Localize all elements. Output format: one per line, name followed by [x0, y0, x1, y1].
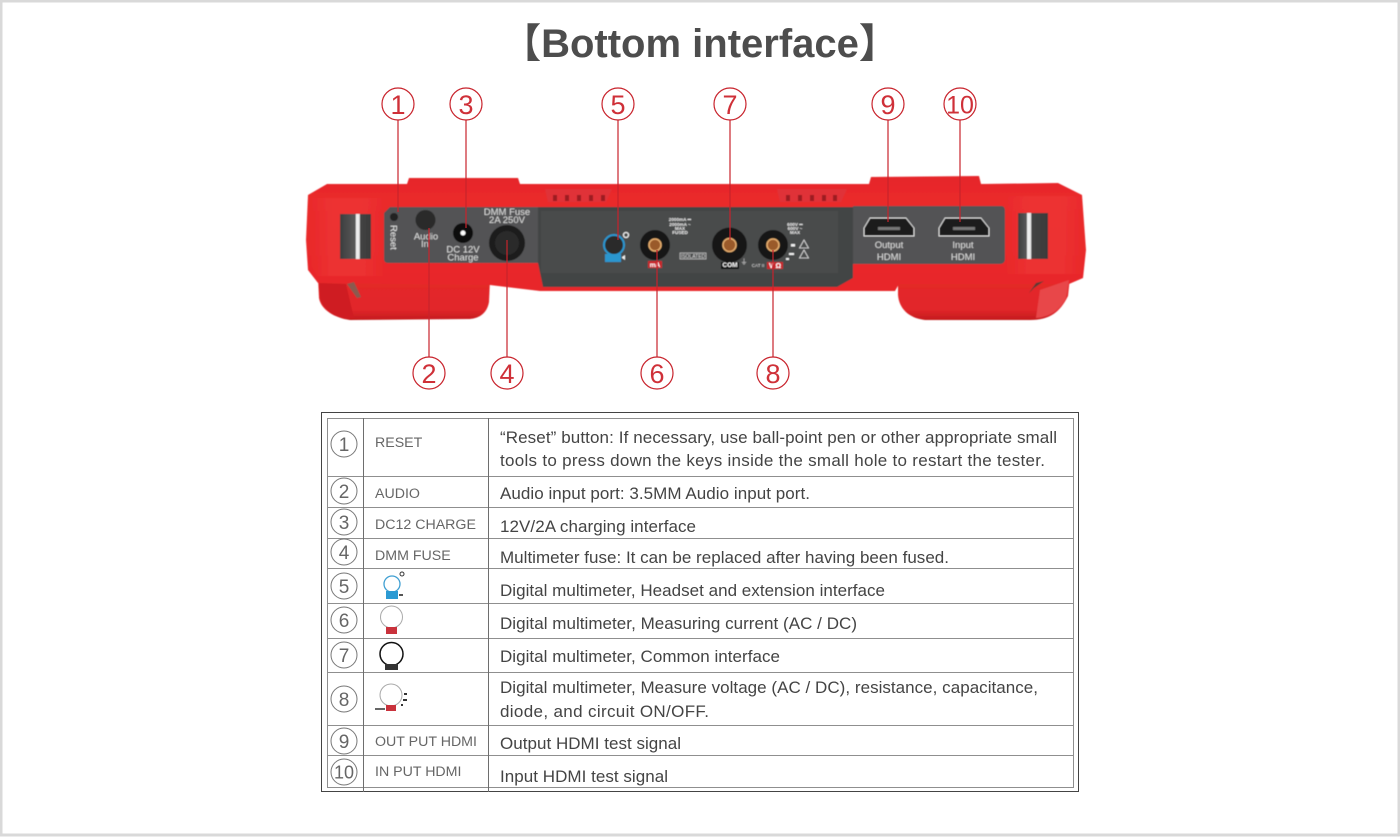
- row 4: Multimeter fuse: It can be replaced after having been fused.: [500, 548, 949, 567]
- headset jack: [604, 235, 624, 255]
- row 9: 9: [339, 732, 349, 753]
- left foot shading: [319, 283, 354, 319]
- audio jack: [416, 210, 436, 230]
- callout 9: [872, 88, 904, 222]
- callout 5: 5: [610, 90, 626, 120]
- row 2: [331, 478, 810, 504]
- mA rating: [669, 217, 692, 235]
- callout 9: 9: [880, 90, 896, 120]
- callout 7: 7: [722, 90, 738, 120]
- row 9: [331, 728, 681, 754]
- COM jack: [712, 228, 747, 262]
- row 10: [331, 759, 668, 786]
- row 1: RESET: [375, 435, 423, 451]
- row 1: [331, 428, 1057, 470]
- left vents: [553, 195, 605, 201]
- right foot light corner: [1036, 280, 1069, 318]
- right body highlight: [1006, 196, 1084, 274]
- row 10: Input HDMI test signal: [500, 767, 668, 786]
- row 7: 7: [339, 646, 349, 667]
- device: bottom view of tester: ⏚: [740, 258, 748, 266]
- callout 10: 10: [946, 92, 974, 120]
- device: bottom view of tester: CAT II: [752, 263, 764, 268]
- left foot slit: [347, 282, 361, 298]
- audio label: Audio: [414, 232, 438, 242]
- row 1: “Reset” button: If necessary, use ball-point pen or other appropriate small: [500, 428, 1057, 447]
- title: 【Bottom interface】: [501, 22, 899, 66]
- row 3: [331, 509, 696, 536]
- left body highlight: [310, 198, 384, 276]
- callout 1: [382, 88, 414, 212]
- right grey panel: [853, 206, 1005, 264]
- device: bottom view of tester: HDMI: [877, 252, 901, 263]
- callout 1: 1: [390, 90, 406, 120]
- row 2: AUDIO: [375, 486, 420, 502]
- device: bottom view of tester: 2A 250V: [489, 215, 526, 226]
- icon: COM jack: [380, 642, 403, 670]
- row 4: [331, 539, 949, 567]
- callout 4: 4: [499, 359, 515, 389]
- row 8: [331, 678, 1038, 721]
- row 2: 2: [339, 482, 349, 503]
- row 6: 6: [339, 611, 349, 632]
- DC jack: [453, 223, 473, 243]
- row 3: 3: [339, 513, 349, 534]
- row 2: Audio input port: 3.5MM Audio input port.: [500, 484, 810, 503]
- callout 4: [491, 240, 523, 389]
- centre multimeter recess: [538, 207, 853, 287]
- input HDMI port: [939, 218, 989, 236]
- device: bottom view of tester: V Ω: [769, 263, 781, 270]
- row 8: diode, and circuit ON/OFF.: [500, 702, 709, 721]
- icon: headset jack: [384, 572, 404, 599]
- row 10: 10: [334, 762, 354, 782]
- callout 6: [641, 250, 673, 389]
- right side slot: [1018, 213, 1048, 259]
- voltage rating and warning symbols: 600V ~: [788, 226, 803, 231]
- row 4: DMM FUSE: [375, 548, 451, 564]
- left side slot: [340, 214, 371, 259]
- V jack: [758, 230, 788, 260]
- icon: mA jack: [380, 606, 402, 634]
- right vents: [786, 195, 837, 201]
- row 8: Digital multimeter, Measure voltage (AC / DC), resistance, capacitance,: [500, 678, 1038, 697]
- device: bottom view of tester: ISOLATED: [681, 254, 706, 260]
- mA rating: 2000mA ⎓: [669, 217, 692, 222]
- row 3: 12V/2A charging interface: [500, 517, 696, 536]
- voltage rating and warning symbols: MAX: [790, 230, 801, 235]
- input HDMI label: Input: [952, 240, 974, 251]
- row 4: 4: [339, 543, 350, 564]
- right vent bracket: [777, 189, 847, 202]
- callout 8: [757, 250, 789, 389]
- row 3: DC12 CHARGE: [375, 517, 476, 533]
- callout 2: [413, 228, 445, 389]
- right foot slit: [1029, 281, 1044, 293]
- row 1: 1: [339, 435, 349, 456]
- reset hole: [390, 213, 398, 221]
- callout 8: 8: [765, 359, 781, 389]
- row 1: tools to press down the keys inside the small hole to restart the tester.: [500, 451, 1045, 470]
- fuse holder: [489, 225, 525, 261]
- table: [322, 412, 1078, 792]
- device: bottom view of tester: mA: [650, 262, 661, 269]
- output HDMI label: Output: [875, 240, 904, 251]
- right foot: [898, 277, 1070, 320]
- mA rating: MAX: [675, 226, 686, 231]
- icon: V jack: [375, 684, 407, 711]
- row 7: Digital multimeter, Common interface: [500, 647, 780, 666]
- row 9: OUT PUT HDMI: [375, 734, 477, 750]
- device: bottom view of tester: In: [421, 239, 429, 250]
- device: bottom view of tester: HDMI: [951, 252, 975, 263]
- row 9: Output HDMI test signal: [500, 734, 681, 753]
- callout 7: [714, 88, 746, 240]
- mA rating: FUSED: [672, 230, 688, 235]
- row 5: Digital multimeter, Headset and extension interface: [500, 581, 885, 600]
- callout 5: [602, 88, 634, 240]
- fuse label: DMM Fuse: [484, 207, 530, 218]
- device: bottom view of tester: COM: [722, 262, 738, 269]
- row 10: IN PUT HDMI: [375, 764, 461, 780]
- left foot: [318, 278, 490, 320]
- row 5: [331, 572, 885, 600]
- mA rating: 2000mA ~: [669, 222, 691, 227]
- left vent bracket: [545, 189, 612, 202]
- row 8: 8: [339, 690, 349, 711]
- reset label: Reset: [388, 225, 398, 250]
- callout 3: 3: [458, 90, 474, 120]
- device: bottom view of tester: [306, 176, 1086, 320]
- voltage rating and warning symbols: 600V ⎓: [787, 222, 803, 227]
- row 6: [331, 606, 857, 634]
- DC label: DC 12V: [446, 244, 480, 256]
- callout 10: [944, 88, 976, 222]
- output HDMI port: [864, 218, 914, 236]
- mA jack: [640, 230, 670, 260]
- isolated tag: [680, 253, 706, 259]
- callout 3: [450, 88, 482, 228]
- row 7: [331, 642, 780, 670]
- device: bottom view of tester: Charge: [447, 252, 479, 264]
- voltage rating and warning symbols: [787, 222, 803, 235]
- callouts: numbered leader lines: [382, 88, 976, 389]
- row 5: 5: [339, 577, 349, 598]
- device body: [306, 176, 1086, 291]
- callout 2: 2: [421, 359, 437, 389]
- callout 6: 6: [649, 359, 665, 389]
- left grey panel: [384, 207, 540, 263]
- recess inner face: [541, 211, 838, 273]
- row 6: Digital multimeter, Measuring current (AC / DC): [500, 614, 857, 633]
